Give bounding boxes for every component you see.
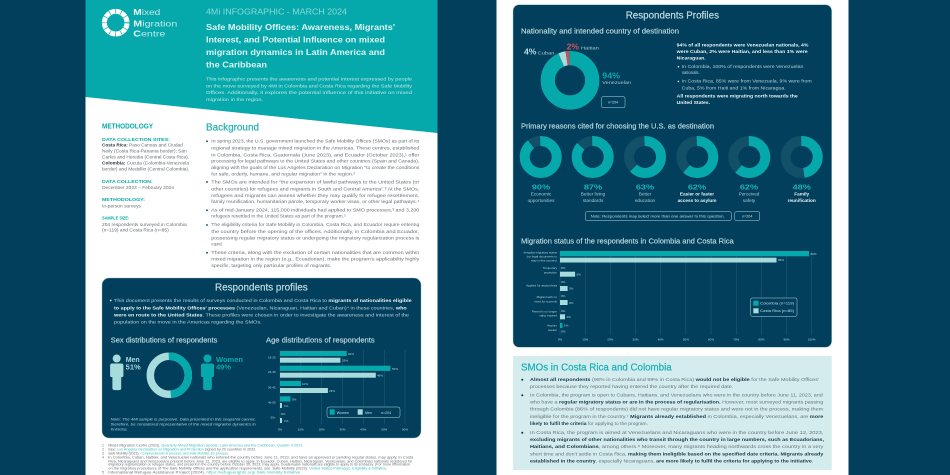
bar chart: migration status: 70% [733,338,740,342]
background bullets: As of mid-January 2024, 115,000 individuals had applied to SMO processes,³ and 3,200 [211,207,420,212]
donuts: primary reasons: Easier or faster [680,192,714,197]
logo: Mixed Migration Centre [104,8,177,39]
background bullets: the country before the opening of the offices. Additionally, in Colombia and Ecuador, [211,229,419,234]
nationality labels: 94% [602,71,620,80]
nationality labels [524,42,632,85]
donuts: primary reasons: 48% [793,183,811,192]
bar chart: migration status: 0% [561,294,566,298]
donuts: primary reasons: Economic [531,192,552,197]
methodology sidebar: In-person surveys [102,203,142,208]
methodology sidebar [102,124,189,233]
heading: sex distribution: Sex distributions of respondents [111,335,218,344]
nationality summary text: Nicaraguan. [677,56,706,61]
donuts: primary reasons: education [635,198,656,203]
background bullets: refugees resettled in the United States as part of the program.⁵ [211,213,346,218]
bar chart: migration status: need for a permit [534,299,557,303]
donuts: primary reasons: 87% [584,183,603,192]
nationality summary text: Cuba, 5% from Haiti and 1% from Nicaragua. [682,85,786,90]
bar chart: migration status: 90% [783,338,790,342]
women label [216,355,243,372]
nationality summary text: were Cuban, 2% were Haitian, and less than 1% were [676,49,808,54]
intro paragraph: This infographic presents the awareness and potential interest expressed by people [206,76,413,82]
bar chart: age: 46-55 [268,400,276,404]
methodology sidebar: border) and Medellin (Central Colombia). [102,166,189,172]
donuts: primary reasons: opportunities [528,198,555,203]
SMOs bullets: likely to fulfil the criteria for applying to the program. [530,421,648,426]
donut: sex [150,356,188,394]
bar chart: age: 0% [281,412,286,416]
nationality labels: 2% [567,42,579,51]
footnotes: migratory regularization or refugee status, and present in the country before October 30, 2023, may apply. Guatemalan nationals are eligible to apply in its embassy. (For more information [108,463,410,467]
SMOs bullets: processes because they reported having entered the country after the required date. [530,384,733,389]
nationality summary text: All respondents were migrating north towards the [677,93,798,98]
bar chart: age: 55+ [271,416,276,420]
footnotes: See: Los Angeles Declaration on Migration and Protection signed by 20 countries in 2022. [108,447,256,451]
bar chart: age: 18-25 [268,356,276,360]
sample note: the Americas. [111,427,127,432]
nationality summary text [676,43,812,105]
nationality labels: Venezuelan [602,80,632,85]
legend: age chart [327,407,400,418]
main title: Interest, and Potential Influence on mixed [206,35,385,45]
background heading: Background [206,123,259,134]
methodology sidebar: Costa Rica: Paso Canoas and Ciudad [102,143,183,148]
heading: primary reasons: Primary reasons cited for choosing the U.S. as destination [521,122,714,131]
panel: SMOs in Costa Rica and Colombia [513,356,832,470]
donuts: primary reasons: Family [794,192,810,197]
SMOs bullets: Haitians, and Colombians , among others.⁸ Moreover, many migrants heading northwards cross the country in a very [530,444,824,449]
logo: Mixed Migration Centre: Centre [133,30,166,39]
donuts: primary reasons [525,141,818,203]
intro paragraph [206,76,413,102]
footnotes: 2 [102,447,104,451]
legend: migration status [751,298,797,316]
bar chart: migration status: 2% [566,315,571,319]
methodology sidebar: DATA COLLECTION: [102,179,153,185]
bar chart: migration status: 0% [558,338,562,342]
panel intro text: population on the move in the Americas regarding the SMOs. [114,320,262,324]
bar chart: migration status: Temporary [543,266,557,270]
bar chart: migration status: Irregular migratory status [524,250,557,254]
donuts: primary reasons: 62% [688,183,707,192]
bar chart: age: 10% [298,428,304,432]
methodology sidebar: Colombia: Cucuta (Colombia-Venezuela [102,160,189,166]
legend: migration status: Colombia (n=119) [760,302,794,306]
legend: migration status: Costa Rica (n=85) [760,309,794,313]
bar chart: migration status: 10% [582,338,589,342]
bar chart: migration status: valid, expired [539,314,557,318]
background bullets: required. [211,242,223,247]
background bullets: possessing regular migratory status or undergoing the migratory regularization process is [211,235,420,240]
background bullets: aligning with the goals of the Los Angeles Declaration on Migration "to create the conditions [211,165,420,170]
bar chart: age: 32% [348,352,354,356]
background bullets: processing for legal pathways to the United States and other countries (Spain and Canada), [211,159,419,164]
panel: respondents profiles (left) [102,278,421,438]
bar chart: migration status: 0% [561,330,566,334]
bar chart: migration status: (no legal documents to [527,254,557,258]
bar chart: migration status: 50% [683,338,689,342]
nationality labels: Haitian [581,45,600,50]
bar chart: migration status: Migrant with no [537,295,557,299]
background bullets: in Colombia, Costa Rica, Guatemala (June 2023), and Ecuador (October 2023),¹ offer [211,152,420,157]
background bullets: These criteria, along with the exclusion of certain nationalities that are common within [211,250,420,255]
bar chart: migration status: stay in this country) [531,258,557,262]
background bullets: specific, targeting only particular profiles of migrants. [211,263,331,268]
bar chart: migration status [524,250,817,342]
SMOs bullets: ineligible for the program in the country.⁷ Migrants already established in Colombia, especially Venezuelans, are more [530,414,824,419]
note boxes: Note: Respondents may select more than one answer to this question. [591,214,725,218]
methodology sidebar: DATA COLLECTION SITES: [102,137,170,143]
donuts: primary reasons: 90% [532,183,551,192]
heading: nationality: Nationality and intended country of destination [521,26,679,35]
heading: migration status: Migration status of the respondents in Colombia and Costa Rica [521,237,735,246]
donuts: primary reasons: 63% [636,183,655,192]
logo: Mixed Migration Centre: M igration [133,20,177,29]
background bullets: other countries) for refugees and migrants in South and Central America".³ At the SMOs, [211,186,419,191]
SMOs bullets: short time and don't settle in Costa Rica, making them ineligible based on the specified date criteria. Migrants already [530,452,824,457]
SMOs bullets: In Colombia, the program is open to Cubans, Haitians, and Venezuelans who were in the country before June 11, 2023, and [530,392,823,397]
bar chart: migration status: Applied for asylum/visa [526,284,557,288]
bar chart: migration status: 60% [708,338,714,342]
methodology sidebar: Carlos and Heredia (Central Costa Rica). [102,154,189,160]
bar chart: age: 30% [339,428,346,432]
methodology sidebar: Neily (Costa Rica-Panama border); San [102,149,187,154]
bar chart: migration status: 40% [658,338,664,342]
methodology sidebar: December 2023 – February 2024 [102,185,174,190]
bar chart: age: 40% [360,428,367,432]
bar chart: migration status: seeker [548,328,557,332]
donuts: primary reasons: safety [743,198,756,203]
bar chart: migration status: Asylum [547,323,557,327]
background bullets: refugees and migrants can assess whether they may qualify for refugee resettlement, [211,193,419,198]
main title [206,22,395,70]
bar chart: migration status: Permit is no longer [532,309,557,313]
SMOs heading: SMOs in Costa Rica and Colombia [521,362,672,374]
women label: 49% [216,362,231,372]
methodology sidebar: SAMPLE SIZE: [102,216,130,222]
background bullets: In spring 2023, the U.S. government launched the Safe Mobility Offices (SMOs) as part of its [211,139,420,144]
bar chart: migration status: 80% [758,338,765,342]
legend: age chart: n=204 [381,411,391,415]
legend: age chart: Men [365,411,372,415]
panel heading: Respondents profiles [215,283,308,294]
bar chart: age: 60% [402,428,408,432]
footnotes: 1 [102,443,104,447]
methodology sidebar: METHODOLOGY: [102,197,145,203]
intro paragraph: Offices. Additionally, it explores the potential influence of this initiative on mixed [206,90,413,95]
bar chart: age: 46% [377,374,383,378]
donuts: primary reasons: reunification [788,198,816,203]
footnotes: Safe Mobility (2023). Comprendiendo el proceso, and Safe Mobility: En proceso. [108,451,229,455]
nationality summary text: United States. [677,100,710,105]
bar chart: migration status: 1% [564,324,569,328]
methodology sidebar: (n=119) and Costa Rica (n=85) [102,228,169,233]
bar chart: migration status: 100% [808,338,816,342]
footnotes [102,443,413,474]
SMOs bullets: through Colombia (86% of respondents) did not have regular migratory status and were not in the process, making them [530,407,823,412]
icon: woman [201,354,214,390]
footnotes: International Refugee Assistance Project (2024). https://refugeerights.org/ Safe Mobility Initiative [108,470,300,474]
bar chart: age: 26-35 [268,370,276,374]
panel heading: Respondents Profiles [626,10,719,21]
intro paragraph: migration in the region. [206,97,263,102]
SMOs bullets: established in the country , especially Nicaraguans, are more likely to fulfil the criteria for applying to the initiative . [530,459,813,464]
bar chart: age: 1% [284,404,289,408]
footnotes: 3 [102,451,104,455]
bar chart: migration status: 99% [810,252,817,256]
teal header band [86,0,438,133]
panel: respondents profiles (right) [513,5,832,347]
background bullets: family reunification, humanitarian parole, temporary worker visas, or other legal pathways.⁴ [211,199,419,204]
SMOs bullets: who have a regular migratory status or are in the process of regularisation. However, most surveyed migrants passing [530,400,824,405]
bar chart: age: 23% [329,389,335,393]
donuts: primary reasons: access to asylum [678,198,716,203]
background bullets [206,139,420,268]
bar chart: migration status: 86% [778,258,784,262]
header kicker: 4Mi INFOGRAPHIC - MARCH 2024 [206,7,347,17]
page 2 [496,0,848,475]
nationality summary text: In Colombia, 100% of respondents were Venezuelan [682,64,804,69]
background bullets: regional strategy to manage mixed migration in the Americas. These centres, established [211,146,420,151]
bar chart: age: 1% [284,419,289,423]
bar chart: migration status: 30% [632,338,639,342]
SMOs bullets: Almost all respondents (98% in Colombia and 99% in Costa Rica) would not be eligible for the Safe Mobility Offices' [530,377,819,382]
men label: 51% [126,362,141,372]
note boxes: n=204 [742,214,752,218]
legend: age chart: Women [337,411,349,415]
main title: migration dynamics in Latin America and [206,47,385,57]
page 1 [86,0,438,475]
footnotes: 5 [102,470,104,474]
panel intro text: to apply to the Safe Mobility Offices' processes (Venezuelan, Nicaraguan, Haitian and Cuban)⁴ in these countries, who [114,305,407,310]
background bullets: The SMOs are intended for "the expansion of lawful pathways to the United States (or [211,179,420,184]
donut: nationality [548,58,592,103]
nationality summary text: In Costa Rica, 85% were from Venezuela, 9% were from [682,79,812,84]
SMOs bullets: In Costa Rica, the program is aimed at Venezuelans and Nicaraguans who were in the country before June 12, 2023, [530,430,823,435]
donuts: primary reasons: standards [583,198,604,203]
bar chart: migration status: 6% [576,272,581,276]
donuts: primary reasons: 62% [740,183,759,192]
sample size box [601,97,625,108]
footnotes: In Colombia, Cuban, Haitian, and Venezuelan nationals who entered the country before June 11, 2023, and have an approved or pending regular status, may apply. In Costa [108,456,413,460]
main title: the Caribbean [206,60,267,70]
intro paragraph: on the move surveyed by 4Mi in Colombia and Costa Rica regarding the Safe Mobility [206,83,413,88]
bar chart: age: 29% [342,358,348,362]
footnotes: 4 [102,456,104,460]
background bullets: mixed migration in the region (e.g., Ecuadorian), make the program's applicability highly [211,257,420,262]
bar chart: migration status: protection [544,270,557,274]
panel intro text: This document presents the results of surveys conducted in Colombia and Costa Rica to migrants of nationalities eligible [114,298,412,303]
bar chart: age [268,350,408,432]
nationality summary text: nationals. [682,70,700,75]
men label: Men [126,355,140,364]
methodology sidebar: 204 respondents surveyed in Colombia [102,222,187,227]
bar chart: age: 20% [319,428,325,432]
sample note [111,417,256,432]
panel intro text [110,298,412,324]
bar chart: age: 50% [381,428,388,432]
main title: Safe Mobility Offices: Awareness, Migrants' [206,22,395,32]
logo: Mixed Migration Centre: Mixed [133,8,160,17]
SMOs bullets [521,377,824,464]
methodology sidebar: METHODOLOGY [102,124,153,131]
bar chart: age: 10% [302,382,308,386]
women label: Women [216,355,243,364]
SMOs bullets: excluding migrants of other nationalities who transit through the country in large numbers, such as Ecuadorians, [530,437,824,442]
nationality summary text: 94% of all respondents were Venezuelan nationals, 4% [677,43,808,48]
bar chart: migration status: 3% [569,286,574,290]
footnotes: on the migratory procedures of The Safe Mobility Offices and the application requirements, see: Safe Mobility (2023). United States Pathways, Eligibility & Initiative. [108,466,387,470]
bar chart: age: 0% [278,428,282,432]
sample note: Note: The 4Mi sample is purposive. Data presented in this snapshot cannot, [111,417,256,422]
bar chart: migration status: 3% [569,301,574,305]
nationality labels: 4% [524,47,536,56]
donuts: primary reasons: Better living [581,192,606,197]
sample note: therefore, be considered representative of the mixed migration dynamics in [111,422,256,427]
bar chart: age: 36-45 [268,386,276,390]
donuts: primary reasons: Perceived [739,192,760,197]
footnotes: Rica, Nicaraguans and Venezuelans present before June 12, 2023, are eligible to apply. In Ecuador, Cuban, Haitian, Nicaraguan, Venezuelan, and Colombian nationals registered for [108,459,413,463]
background bullets: The eligibility criteria for Safe Mobility in Colombia, Costa Rica, and Ecuador require entering [211,222,420,227]
bar chart: age: 53% [392,367,398,371]
nationality labels: Cuban [538,50,555,55]
panel intro text: were en route to the United States . These profiles were chosen in order to investigate the awareness and interest of the [113,312,409,317]
footnotes: Mixed Migration Centre (2023). Quarterly Mixed Migration Update: Latin America and the Caribbean, Quarter 4 2023. [108,443,303,447]
men label [126,355,141,372]
icon: man [110,354,123,390]
bar chart: age: 5% [292,398,297,402]
bar chart: migration status: 0% [561,280,566,284]
bar chart: migration status: 20% [607,338,614,342]
sample size box: n=204 [608,100,618,104]
background bullets: for safe, orderly, humane, and regular migration" in the region.² [211,172,355,177]
bar chart: migration status: 0% [561,309,566,313]
bar chart: migration status: 0% [561,266,566,270]
heading: age distribution: Age distributions of respondents [266,335,375,344]
donuts: primary reasons: Better [639,192,652,197]
note boxes [585,212,760,220]
